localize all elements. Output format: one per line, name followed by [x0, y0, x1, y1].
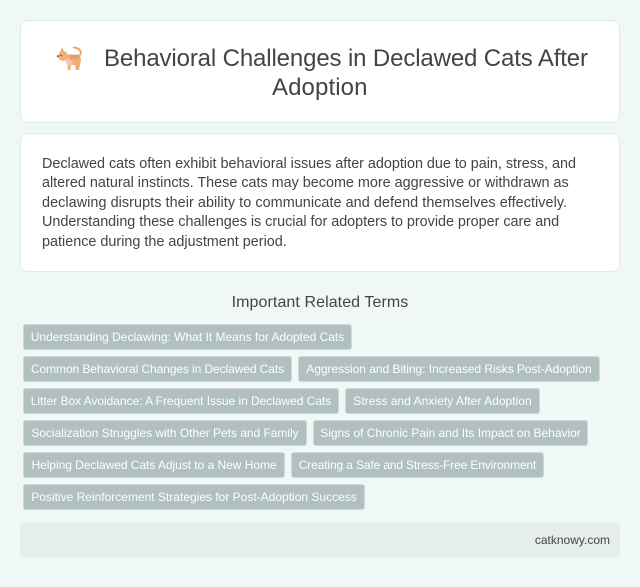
description text: altered natural instincts. These cats may become more aggressive or withdrawn as [42, 175, 569, 191]
description text [42, 156, 576, 250]
tag: Socialization Struggles with Other Pets and Family [31, 426, 299, 440]
tag [23, 324, 352, 350]
panel: title card [20, 20, 620, 123]
panel: description [20, 133, 620, 272]
description text: patience during the adjustment period. [42, 234, 287, 250]
tag [23, 484, 365, 510]
tag: Common Behavioral Changes in Declawed Cats [31, 362, 284, 376]
tag: Helping Declawed Cats Adjust to a New Home [31, 458, 277, 472]
heading: related terms: Important Related Terms [232, 294, 408, 311]
tag [313, 420, 588, 446]
tag [23, 356, 292, 382]
tag: Creating a Safe and Stress-Free Environment [299, 458, 536, 472]
tag: Stress and Anxiety After Adoption [353, 394, 532, 408]
tag: Positive Reinforcement Strategies for Post-Adoption Success [31, 490, 357, 504]
tag: Understanding Declawing: What It Means for Adopted Cats [31, 330, 344, 344]
tag [23, 420, 307, 446]
tag [345, 388, 540, 414]
icon: cat [56, 46, 82, 70]
description text: declawing disrupts their ability to communicate and defend themselves effectively. [42, 195, 567, 211]
title: Adoption [272, 74, 368, 101]
footer bar [20, 523, 620, 557]
footer source text: catknowy.com [535, 533, 610, 547]
tags list [23, 324, 600, 510]
description text: Declawed cats often exhibit behavioral issues after adoption due to pain, stress, and [42, 156, 576, 172]
description text: Understanding these challenges is crucial for adopters to provide proper care and [42, 214, 559, 230]
tag [23, 452, 285, 478]
tag: Signs of Chronic Pain and Its Impact on Behavior [320, 426, 581, 440]
tag [298, 356, 600, 382]
title [104, 45, 588, 101]
title: Behavioral Challenges in Declawed Cats After [104, 45, 588, 72]
tag [291, 452, 544, 478]
tag [23, 388, 339, 414]
tag: Aggression and Biting: Increased Risks Post-Adoption [306, 362, 592, 376]
tag: Litter Box Avoidance: A Frequent Issue in Declawed Cats [31, 394, 331, 408]
